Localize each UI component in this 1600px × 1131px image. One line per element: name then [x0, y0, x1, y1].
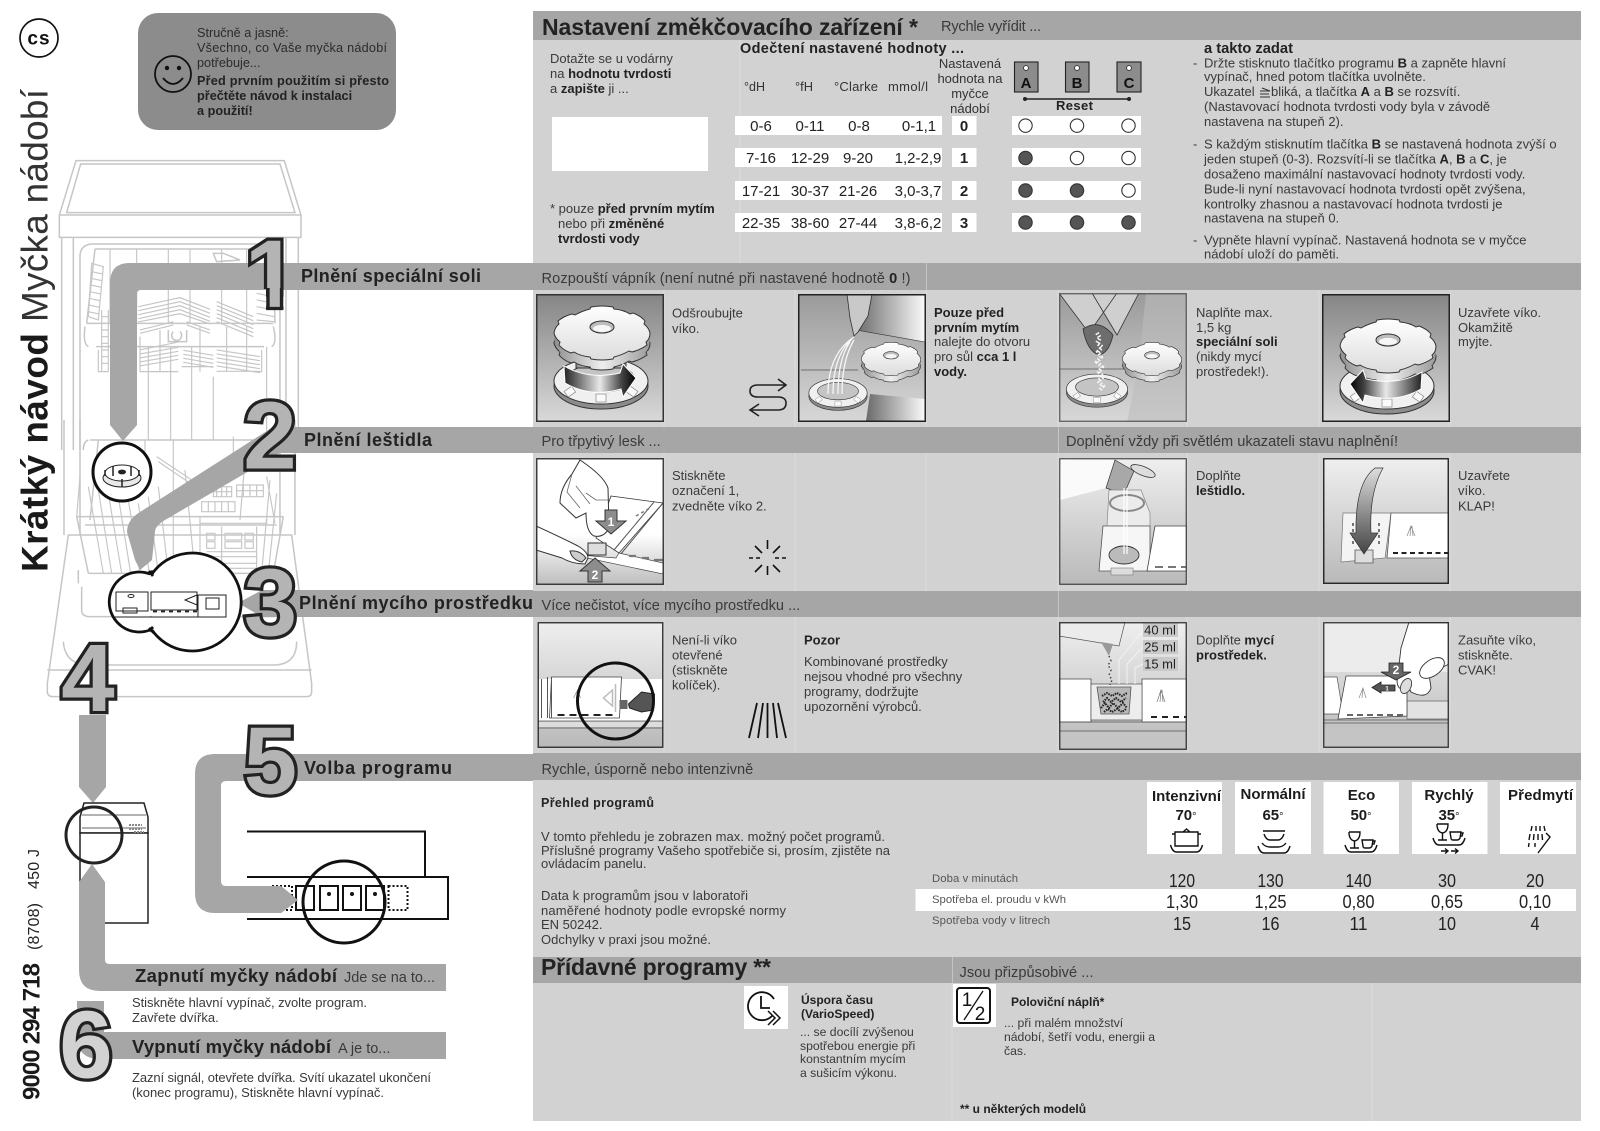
arrow: step 3 detergent	[238, 590, 533, 617]
language badge: cs	[27, 28, 51, 50]
text: fill rinse aid: Doplňte	[1196, 468, 1241, 483]
text: how to enter setting	[1193, 41, 1557, 262]
text: program overview: Data k programům jsou v laboratoři	[541, 888, 748, 903]
table: program consumption	[916, 871, 1576, 934]
table: hardness settings: 9-20	[843, 150, 873, 167]
text: how to enter setting: nádobí uloží do paměti.	[1204, 246, 1339, 262]
document number vertical: 450 J	[26, 849, 43, 889]
arrow: step 6 off band	[77, 1001, 446, 1059]
text: program overview: naměřené hodnoty podle evropské normy	[541, 903, 786, 918]
write-in box	[552, 117, 708, 171]
text: how to enter setting: nastavena na stupeň 0.	[1204, 210, 1339, 226]
text: pour water	[934, 305, 1030, 379]
text: if lid not open	[672, 632, 737, 692]
image: dosing detergent: 15 ml	[1144, 656, 1176, 672]
band text: detergent: Více nečistot, více mycího prostředku ...	[542, 598, 800, 614]
text: fill salt: 1,5 kg	[1196, 320, 1231, 335]
text: half load	[1004, 995, 1155, 1058]
text: close cap: Okamžitě	[1458, 320, 1513, 335]
table: hardness settings: 3,8-6,2	[895, 215, 941, 232]
text: how to enter setting: Držte stisknuto tlačítko programu B a zapněte hlavní	[1204, 56, 1506, 70]
text: warning: Pozor	[804, 632, 840, 648]
text: unscrew: Odšroubujte	[672, 306, 743, 320]
text: if lid not open: otevřené	[672, 648, 723, 662]
image: open rinse aid lid: 1	[608, 515, 615, 529]
text: close lid: Uzavřete	[1458, 468, 1510, 483]
table: hardness settings: myčce	[951, 86, 989, 101]
text: fill salt: prostředek!).	[1196, 364, 1269, 379]
text: how to enter setting: a takto zadat	[1204, 41, 1293, 57]
text: fill salt	[1196, 305, 1278, 379]
numeral 6: 6	[59, 992, 113, 1098]
table: program consumption: 0,80	[1342, 892, 1374, 912]
table: hardness settings: 1	[960, 150, 968, 167]
table: hardness settings: 30-37	[791, 183, 829, 200]
image: slide lid and press	[1323, 622, 1449, 748]
program card: Eco	[1324, 782, 1399, 854]
image: fill salt	[1059, 293, 1187, 422]
document number vertical: (8708)	[26, 903, 43, 950]
callout: quick tips box: Před prvním použitím si přesto	[197, 74, 389, 88]
program card: Intenzivní: 70°	[1175, 807, 1197, 824]
text: switch on instructions	[132, 995, 367, 1025]
text: VarioSpeed	[800, 992, 915, 1080]
text: VarioSpeed: Úspora času	[801, 992, 873, 1007]
text: how to enter setting: Ukazatel	[1204, 84, 1255, 99]
text: close cap: myjte.	[1458, 334, 1493, 349]
text: how to enter setting: nastavena na stupeň 2).	[1204, 114, 1344, 129]
text: warning: nejsou vhodné pro všechny	[804, 669, 963, 684]
text: how to enter setting: bliká, a tlačítka A a B se rozsvítí.	[1271, 84, 1460, 99]
icon: spray lines	[749, 703, 786, 738]
icon: clock VarioSpeed	[744, 986, 788, 1029]
circle: dispenser detail	[109, 553, 241, 651]
heading: softener: Rychle vyřídit ...	[941, 19, 1041, 35]
text: how to enter setting: S každým stisknutím tlačítka B se nastavená hodnota zvýší o	[1204, 136, 1557, 152]
numeral 5: 5	[244, 708, 297, 814]
table: hardness settings: hodnota na	[937, 71, 1003, 86]
text: fill salt: speciální soli	[1196, 334, 1278, 349]
band text: adaptable: Jsou přizpůsobivé ...	[960, 965, 1094, 981]
text: press marking	[672, 468, 767, 514]
arrow: step 2 rinse aid	[127, 427, 533, 570]
illustration: control panel	[247, 832, 448, 943]
table: hardness settings: 38-60	[791, 215, 829, 232]
step label 1: Plnění speciální soli	[301, 266, 481, 286]
text: VarioSpeed: konstantním mycím	[800, 1052, 906, 1066]
image: dosing detergent	[1059, 622, 1187, 750]
text: how to enter setting: vypínač, hned potom tlačítka uvolněte.	[1204, 69, 1426, 84]
program card: Rychlý: 35°	[1438, 807, 1460, 824]
text: how to enter setting: -	[1193, 56, 1197, 70]
table: hardness settings: °dH	[744, 79, 765, 94]
text: program overview: ovládacím panelu.	[541, 856, 647, 871]
text: fill rinse aid	[1196, 468, 1245, 498]
text: ask water works: na hodnotu tvrdosti	[550, 66, 671, 81]
text: slide lid: Zasuňte víko,	[1458, 632, 1536, 648]
text: half load: ... při malém množství	[1004, 1016, 1124, 1030]
program card: Předmytí	[1500, 782, 1576, 854]
text: press marking: zvedněte víko 2.	[672, 498, 767, 514]
table: hardness settings	[735, 41, 1141, 232]
image: dosing detergent: 25 ml	[1144, 640, 1176, 654]
text: warning	[804, 632, 963, 714]
step label: switch off: A je to...	[338, 1041, 390, 1057]
heading: additional programs: Přídavné programy **	[541, 954, 771, 980]
table: hardness settings: Nastavená	[939, 56, 1002, 71]
text: switch off instructions: (konec programu), Stiskněte hlavní vypínač.	[132, 1085, 384, 1100]
text: ask water works: a zapište ji ...	[550, 81, 629, 96]
text: switch on instructions: Stiskněte hlavní vypínač, zvolte program.	[132, 995, 367, 1010]
text: warning: Kombinované prostředky	[804, 654, 948, 669]
table: program consumption: 15	[1173, 914, 1191, 934]
table: program consumption: 11	[1350, 914, 1368, 934]
table: hardness settings: 12-29	[791, 150, 829, 167]
table: hardness settings: 0-1,1	[902, 118, 936, 135]
arrow: step 5 program band	[195, 754, 533, 913]
table: hardness settings: 22-35	[742, 215, 780, 232]
text: fill detergent	[1196, 632, 1274, 662]
main vertical title: Krátký návod	[14, 333, 56, 572]
callout: quick tips box: Všechno, co Vaše myčka nádobí	[197, 41, 387, 55]
band text: rinse aid left: Pro třpytivý lesk ...	[542, 434, 661, 450]
table: program consumption: 30	[1438, 871, 1456, 891]
table: hardness settings: 21-26	[839, 183, 877, 200]
table: hardness settings: 17-21	[742, 183, 780, 200]
image: slide lid and press: 1	[1385, 686, 1389, 692]
table: program consumption: 1,25	[1254, 892, 1286, 912]
image: close rinse aid lid	[1323, 458, 1449, 584]
table: program consumption: Spotřeba vody v litrech	[932, 915, 1050, 927]
image: pour rinse aid	[1059, 458, 1187, 585]
text: switch off instructions: Zazní signál, otevřete dvířka. Svítí ukazatel ukončení	[132, 1070, 431, 1085]
text: VarioSpeed: a sušicím výkonu.	[800, 1066, 897, 1080]
icon: half load: 1	[962, 990, 972, 1011]
buttons A B C with reset: C	[1124, 75, 1135, 92]
text: fill salt: Naplňte max.	[1196, 305, 1273, 320]
text: pour water: pro sůl cca 1 l	[934, 349, 1016, 364]
text: switch on instructions: Zavřete dvířka.	[132, 1010, 219, 1025]
text: fill salt: (nikdy mycí	[1196, 349, 1262, 364]
table: program consumption: 1,30	[1166, 892, 1198, 912]
text: program overview: EN 50242.	[541, 917, 602, 932]
program card: Intenzivní: Intenzivní	[1152, 788, 1222, 805]
table: program consumption: 0,65	[1431, 892, 1463, 912]
text: slide lid	[1458, 632, 1536, 678]
text: how to enter setting: jeden stupeň (0-3). Rozsvítí-li se tlačítka A, B a C, je	[1203, 152, 1507, 166]
callout: quick tips box	[138, 13, 396, 130]
table: hardness settings: 0	[960, 118, 968, 135]
table: hardness settings: °fH	[795, 79, 813, 94]
program card: Normální	[1235, 782, 1311, 854]
text: how to enter setting: Bude-li nyní nastavovací hodnota tvrdosti opět zvýšena,	[1204, 182, 1526, 196]
table: program consumption: Doba v minutách	[932, 873, 1018, 885]
text: half load: nádobí, šetří vodu, energii a	[1004, 1030, 1155, 1044]
text: warning: upozornění výrobců.	[804, 699, 922, 714]
text: VarioSpeed: (VarioSpeed)	[801, 1007, 874, 1021]
text: close lid: víko.	[1458, 483, 1485, 498]
table: program consumption: 4	[1530, 914, 1540, 934]
text: half load: čas.	[1004, 1044, 1026, 1058]
text: program overview: V tomto přehledu je zobrazen max. možný počet programů.	[541, 829, 885, 844]
icon: alternating arrows	[750, 379, 786, 416]
text: press marking: označení 1,	[672, 483, 739, 498]
text: fill detergent: prostředek.	[1196, 648, 1267, 662]
band text: rinse aid right: Doplnění vždy při světlém ukazateli stavu naplnění!	[1066, 434, 1398, 450]
buttons A B C with reset: A	[1021, 75, 1032, 92]
text: program overview	[541, 796, 891, 947]
program card: Eco: Eco	[1348, 787, 1375, 804]
buttons A B C with reset: Reset	[1056, 98, 1094, 113]
text: pour water: nalejte do otvoru	[934, 334, 1030, 349]
program card: Eco: 50°	[1350, 807, 1372, 824]
table: hardness settings: 3,0-3,7	[895, 183, 941, 200]
image: slide lid and press: 2	[1393, 663, 1400, 677]
text: pour water: Pouze před	[934, 305, 1004, 320]
footnote: some models: ** u některých modelů	[960, 1102, 1086, 1116]
text: switch off instructions	[132, 1070, 431, 1100]
text: how to enter setting: -	[1193, 232, 1197, 248]
text: ask water works	[550, 51, 673, 96]
text: slide lid: CVAK!	[1458, 662, 1496, 678]
image: open detergent lid	[538, 622, 664, 748]
text: program overview: Odchylky v praxi jsou možné.	[541, 932, 711, 947]
text: how to enter setting: -	[1193, 136, 1197, 152]
heading: softener: Nastavení změkčovacího zařízení *	[542, 14, 918, 40]
text: close cap: Uzavřete víko.	[1458, 305, 1541, 320]
table: program consumption: 20	[1526, 871, 1544, 891]
arrow tip repeated over panel	[240, 886, 298, 913]
step label 5: Volba programu	[304, 758, 452, 778]
text: how to enter setting: dosaženo maximální nastavovací hodnoty tvrdosti vody.	[1204, 166, 1525, 182]
illustration: small appliance	[66, 803, 148, 923]
table: hardness settings: 27-44	[839, 215, 877, 232]
text: close lid	[1458, 468, 1510, 514]
band text: programs: Rychle, úsporně nebo intenzivně	[542, 762, 753, 778]
step label: switch on	[135, 965, 435, 986]
text: close lid: KLAP!	[1458, 498, 1495, 514]
table: program consumption: 10	[1438, 914, 1456, 934]
numeral 3: 3	[244, 550, 297, 656]
image: pour water	[798, 294, 926, 422]
numeral 1	[248, 238, 284, 310]
table: program consumption: Spotřeba el. proudu v kWh	[932, 894, 1066, 906]
text: if lid not open: Není-li víko	[672, 632, 737, 648]
text: if lid not open: kolíček).	[672, 678, 720, 692]
program card: Intenzivní	[1147, 782, 1222, 854]
document number vertical	[18, 849, 46, 1100]
table: hardness settings: 1,2-2,9	[895, 150, 941, 167]
text: ask water works: Dotažte se u vodárny	[550, 51, 673, 66]
table: program consumption: 0,10	[1519, 892, 1551, 912]
icon: smiley	[155, 56, 191, 92]
table: hardness settings: Odečtení nastavené hodnoty ...	[740, 41, 964, 57]
main vertical title	[14, 88, 56, 572]
table: hardness settings: 0-8	[848, 118, 870, 135]
illustration: dishwasher outline	[47, 161, 312, 697]
text: VarioSpeed: spotřebou energie při	[800, 1039, 915, 1053]
step label: switch off: Vypnutí myčky nádobí	[132, 1036, 332, 1057]
circle: salt container detail	[93, 443, 151, 501]
image: unscrew cap	[536, 294, 664, 422]
step label 2: Plnění leštidla	[304, 430, 433, 450]
text: slide lid: stiskněte.	[1458, 648, 1513, 662]
text: how to enter setting: (Nastavovací hodnota tvrdosti vody byla v závodě	[1204, 99, 1490, 114]
text: VarioSpeed: ... se docílí zvýšenou	[800, 1025, 914, 1039]
text: program overview: Přehled programů	[541, 796, 654, 810]
table: hardness settings: mmol/l	[888, 79, 928, 94]
image: close cap	[1322, 294, 1450, 422]
footnote: before first wash	[550, 201, 715, 246]
text: how to enter setting: kontrolky zhasnou a nastavovací hodnota tvrdosti je	[1204, 196, 1502, 212]
arrow: step 1 salt	[110, 263, 533, 441]
image: dosing detergent: 40 ml	[1144, 622, 1176, 638]
numeral 2: 2	[243, 382, 297, 490]
band text: salt: Rozpouští vápník (není nutné při nastavené hodnotě 0 !)	[542, 271, 910, 287]
table: hardness settings: 7-16	[746, 150, 776, 167]
table: hardness settings: 0-6	[750, 118, 772, 135]
table: hardness settings: 0-11	[796, 118, 824, 135]
buttons A B C with reset: B	[1072, 75, 1083, 92]
callout: quick tips box: a použití!	[197, 104, 253, 118]
text: unscrew	[672, 306, 743, 336]
step label 3: Plnění mycího prostředku	[299, 593, 533, 613]
program card: Rychlý: Rychlý	[1424, 787, 1474, 804]
program card: Normální: 65°	[1262, 807, 1284, 824]
numeral 1: 1	[245, 220, 298, 328]
program card: Rychlý	[1412, 782, 1488, 854]
arrows: step 4 down to appliance and up from band	[79, 715, 106, 803]
program card: Předmytí: Předmytí	[1508, 787, 1574, 804]
table: program consumption: 16	[1262, 914, 1280, 934]
image: open rinse aid lid: 2	[592, 568, 599, 582]
text: program overview: Příslušné programy Vašeho spotřebiče si, prosím, zjistěte na	[541, 843, 891, 858]
table: hardness settings: °Clarke	[834, 79, 878, 94]
text: how to enter setting: Vypněte hlavní vypínač. Nastavená hodnota se v myčce	[1204, 232, 1527, 248]
footnote: before first wash: * pouze před prvním mytím	[550, 201, 715, 216]
text: pour water: vody.	[934, 364, 967, 379]
table: hardness settings: 3	[960, 215, 968, 232]
buttons A B C with reset	[1014, 62, 1141, 113]
numeral 4: 4	[61, 625, 115, 732]
callout: quick tips box: Stručně a jasně:	[197, 26, 289, 40]
table: hardness settings: nádobí	[950, 101, 990, 116]
image: open rinse aid lid	[536, 458, 664, 585]
language badge	[20, 19, 58, 57]
main vertical title: Myčka nádobí	[14, 88, 56, 322]
text: warning: programy, dodržujte	[804, 684, 919, 699]
table: program consumption: 120	[1169, 871, 1195, 891]
panel: right background	[533, 11, 1581, 1121]
table: hardness settings: 2	[960, 183, 968, 200]
step label: switch on: Zapnutí myčky nádobí	[135, 965, 338, 986]
footnote: before first wash: nebo při změněné	[558, 216, 664, 231]
table: program consumption: 140	[1346, 871, 1372, 891]
callout: quick tips box: přečtěte návod k instalaci	[197, 89, 352, 103]
step label: switch on: Jde se na to...	[344, 970, 435, 986]
document number vertical: 9000 294 718	[18, 963, 46, 1100]
program card: Normální: Normální	[1240, 786, 1306, 803]
arrow: switch on band	[79, 864, 446, 991]
table: program consumption: 130	[1258, 871, 1284, 891]
text: fill rinse aid: leštidlo.	[1196, 483, 1245, 498]
footnote: before first wash: tvrdosti vody	[558, 231, 640, 246]
text: close cap	[1458, 305, 1541, 349]
text: fill detergent: Doplňte mycí	[1196, 632, 1274, 648]
icon: rinse aid star	[749, 540, 786, 575]
text: unscrew: víko.	[672, 321, 699, 336]
text: if lid not open: (stiskněte	[672, 662, 728, 678]
text: press marking: Stiskněte	[672, 468, 725, 483]
callout: quick tips box: potřebuje...	[197, 56, 260, 70]
icon: half load: 2	[975, 1004, 985, 1025]
text: pour water: prvním mytím	[934, 320, 1019, 335]
text: half load: Poloviční náplň*	[1011, 995, 1105, 1009]
icon: half load	[953, 984, 996, 1027]
